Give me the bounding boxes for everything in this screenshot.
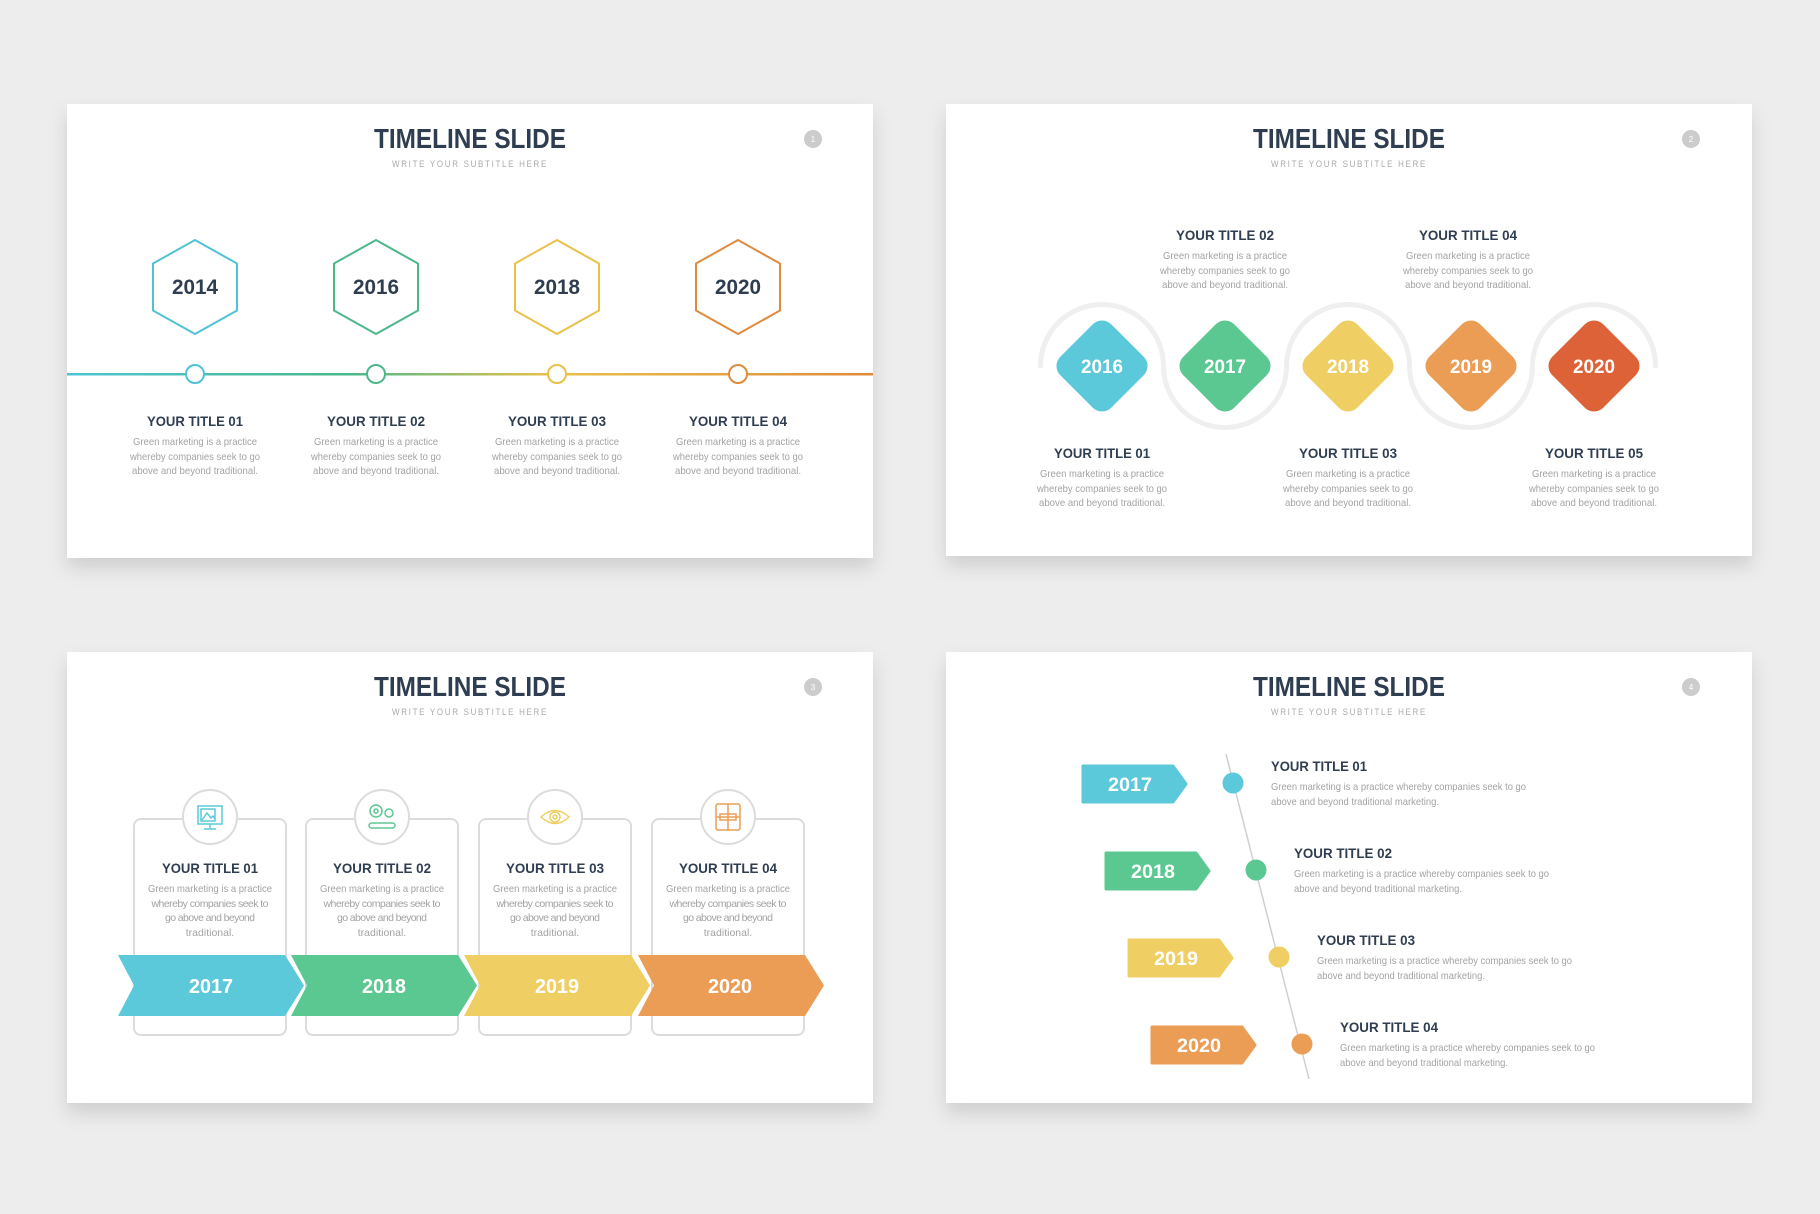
card text: Green marketing is a practice bbox=[148, 883, 272, 895]
page number: 2 bbox=[1689, 135, 1694, 144]
text blocks: YOUR TITLE 02 bbox=[327, 413, 425, 429]
hexagons with years: 2016 bbox=[353, 276, 399, 299]
text blocks: Green marketing is a practice bbox=[676, 436, 800, 448]
text blocks: Green marketing is a practice bbox=[1040, 468, 1164, 480]
page number bbox=[1682, 130, 1700, 148]
text blocks: YOUR TITLE 02 bbox=[1176, 227, 1274, 243]
subtitle: WRITE YOUR SUBTITLE HERE bbox=[1271, 707, 1427, 718]
text blocks: above and beyond traditional. bbox=[494, 465, 620, 477]
card text: whereby companies seek to bbox=[668, 898, 787, 910]
text blocks: YOUR TITLE 03 bbox=[1317, 932, 1415, 948]
page number bbox=[804, 678, 822, 696]
page number: 3 bbox=[811, 683, 816, 692]
card text: YOUR TITLE 02 bbox=[333, 860, 431, 876]
diamonds: 2017 bbox=[1204, 357, 1246, 378]
diamonds: 2019 bbox=[1450, 357, 1492, 378]
title: TIMELINE SLIDE bbox=[1253, 123, 1445, 154]
card text: whereby companies seek to bbox=[322, 898, 441, 910]
card text: YOUR TITLE 03 bbox=[506, 860, 604, 876]
text blocks: YOUR TITLE 01 bbox=[147, 413, 243, 429]
text blocks: YOUR TITLE 05 bbox=[1545, 445, 1643, 461]
timeline dots bbox=[186, 365, 747, 383]
text blocks: YOUR TITLE 04 bbox=[1419, 227, 1517, 243]
text blocks: above and beyond traditional. bbox=[675, 465, 801, 477]
diagonal line bbox=[1226, 754, 1309, 1079]
hexagons with years: 2020 bbox=[715, 276, 761, 299]
card text bbox=[148, 860, 790, 939]
year tags: 2020 bbox=[1177, 1036, 1221, 1057]
chevrons: 2018 bbox=[362, 976, 406, 998]
year tags: 2017 bbox=[1108, 775, 1152, 796]
year tags: 2018 bbox=[1131, 862, 1175, 883]
text blocks: YOUR TITLE 04 bbox=[1340, 1019, 1438, 1035]
card text: go above and beyond bbox=[337, 912, 427, 924]
card text: traditional. bbox=[358, 927, 406, 939]
text blocks: Green marketing is a practice bbox=[1406, 250, 1530, 262]
text blocks: YOUR TITLE 02 bbox=[1294, 845, 1392, 861]
icon: eye target bbox=[541, 810, 569, 824]
timeline line bbox=[67, 373, 873, 376]
card text: go above and beyond bbox=[165, 912, 255, 924]
icon circles bbox=[183, 790, 755, 844]
text blocks: Green marketing is a practice bbox=[314, 436, 438, 448]
text blocks: whereby companies seek to go bbox=[1159, 265, 1290, 277]
page number bbox=[1682, 678, 1700, 696]
chevrons: 2020 bbox=[708, 976, 752, 998]
text blocks: whereby companies seek to go bbox=[491, 451, 622, 463]
text blocks: whereby companies seek to go bbox=[1402, 265, 1533, 277]
diamonds: 2020 bbox=[1573, 357, 1615, 378]
text blocks: above and beyond traditional. bbox=[1039, 497, 1165, 509]
chevrons: 2019 bbox=[535, 976, 579, 998]
diamonds: 2016 bbox=[1081, 357, 1123, 378]
text blocks bbox=[1271, 758, 1595, 1069]
text blocks: YOUR TITLE 04 bbox=[689, 413, 787, 429]
text blocks: above and beyond traditional. bbox=[313, 465, 439, 477]
icon: monitor bbox=[198, 806, 222, 829]
card text: YOUR TITLE 04 bbox=[679, 860, 777, 876]
card text: go above and beyond bbox=[510, 912, 600, 924]
card text: go above and beyond bbox=[683, 912, 773, 924]
text blocks: above and beyond traditional marketing. bbox=[1271, 796, 1439, 808]
panel: slide 3 card chevron timeline bbox=[67, 652, 873, 1103]
text blocks bbox=[1036, 227, 1659, 509]
text blocks: Green marketing is a practice whereby companies seek to go bbox=[1317, 955, 1572, 967]
card text: traditional. bbox=[186, 927, 234, 939]
subtitle: WRITE YOUR SUBTITLE HERE bbox=[392, 707, 548, 718]
text blocks: whereby companies seek to go bbox=[1528, 483, 1659, 495]
text blocks: whereby companies seek to go bbox=[672, 451, 803, 463]
title: TIMELINE SLIDE bbox=[1253, 671, 1445, 702]
hexagons with years: 2014 bbox=[172, 276, 218, 299]
card text: Green marketing is a practice bbox=[493, 883, 617, 895]
text blocks: Green marketing is a practice bbox=[495, 436, 619, 448]
subtitle: WRITE YOUR SUBTITLE HERE bbox=[392, 159, 548, 170]
text blocks: YOUR TITLE 01 bbox=[1271, 758, 1367, 774]
text blocks: YOUR TITLE 03 bbox=[1299, 445, 1397, 461]
card text: whereby companies seek to bbox=[496, 898, 614, 910]
year tags bbox=[1083, 766, 1255, 1063]
text blocks: whereby companies seek to go bbox=[310, 451, 441, 463]
cards bbox=[134, 819, 804, 1035]
text blocks: Green marketing is a practice bbox=[1532, 468, 1656, 480]
diamonds bbox=[1051, 315, 1645, 417]
hexagons with years bbox=[153, 240, 780, 334]
chevrons: 2017 bbox=[189, 976, 233, 998]
text blocks: above and beyond traditional. bbox=[1285, 497, 1411, 509]
panel: slide 2 diamond wave timeline bbox=[946, 104, 1752, 556]
panel: slide 1 hexagon timeline bbox=[67, 104, 873, 558]
text blocks: YOUR TITLE 03 bbox=[508, 413, 606, 429]
dots bbox=[1222, 772, 1312, 1054]
subtitle: WRITE YOUR SUBTITLE HERE bbox=[1271, 159, 1427, 170]
text blocks: whereby companies seek to go bbox=[1036, 483, 1167, 495]
text blocks: above and beyond traditional marketing. bbox=[1294, 883, 1462, 895]
card text: traditional. bbox=[531, 927, 579, 939]
text blocks: Green marketing is a practice bbox=[1163, 250, 1287, 262]
card text: Green marketing is a practice bbox=[666, 883, 790, 895]
text blocks: Green marketing is a practice bbox=[133, 436, 257, 448]
page number: 1 bbox=[811, 135, 816, 144]
title: TIMELINE SLIDE bbox=[374, 123, 566, 154]
year tags: 2019 bbox=[1154, 949, 1198, 970]
text blocks: Green marketing is a practice whereby companies seek to go bbox=[1340, 1042, 1595, 1054]
panel: slide 4 diagonal timeline bbox=[946, 652, 1752, 1103]
text blocks: above and beyond traditional. bbox=[1405, 279, 1531, 291]
card text: traditional. bbox=[704, 927, 752, 939]
chevrons bbox=[118, 955, 824, 1016]
text blocks bbox=[129, 413, 803, 477]
card text: whereby companies seek to bbox=[150, 898, 269, 910]
text blocks: whereby companies seek to go bbox=[1282, 483, 1413, 495]
icon: gears bbox=[369, 805, 395, 828]
hexagons with years: 2018 bbox=[534, 276, 580, 299]
diamonds: 2018 bbox=[1327, 357, 1369, 378]
text blocks: above and beyond traditional marketing. bbox=[1317, 970, 1485, 982]
text blocks: Green marketing is a practice whereby companies seek to go bbox=[1271, 781, 1526, 793]
page number: 4 bbox=[1689, 683, 1694, 692]
text blocks: Green marketing is a practice whereby companies seek to go bbox=[1294, 868, 1549, 880]
text blocks: YOUR TITLE 01 bbox=[1054, 445, 1150, 461]
page number bbox=[804, 130, 822, 148]
text blocks: Green marketing is a practice bbox=[1286, 468, 1410, 480]
card text: YOUR TITLE 01 bbox=[162, 860, 258, 876]
icon: book bbox=[716, 804, 740, 830]
wave line bbox=[1040, 304, 1656, 428]
card text: Green marketing is a practice bbox=[320, 883, 444, 895]
text blocks: above and beyond traditional marketing. bbox=[1340, 1057, 1508, 1069]
text blocks: whereby companies seek to go bbox=[129, 451, 260, 463]
text blocks: above and beyond traditional. bbox=[1162, 279, 1288, 291]
text blocks: above and beyond traditional. bbox=[1531, 497, 1657, 509]
text blocks: above and beyond traditional. bbox=[132, 465, 258, 477]
title: TIMELINE SLIDE bbox=[374, 671, 566, 702]
